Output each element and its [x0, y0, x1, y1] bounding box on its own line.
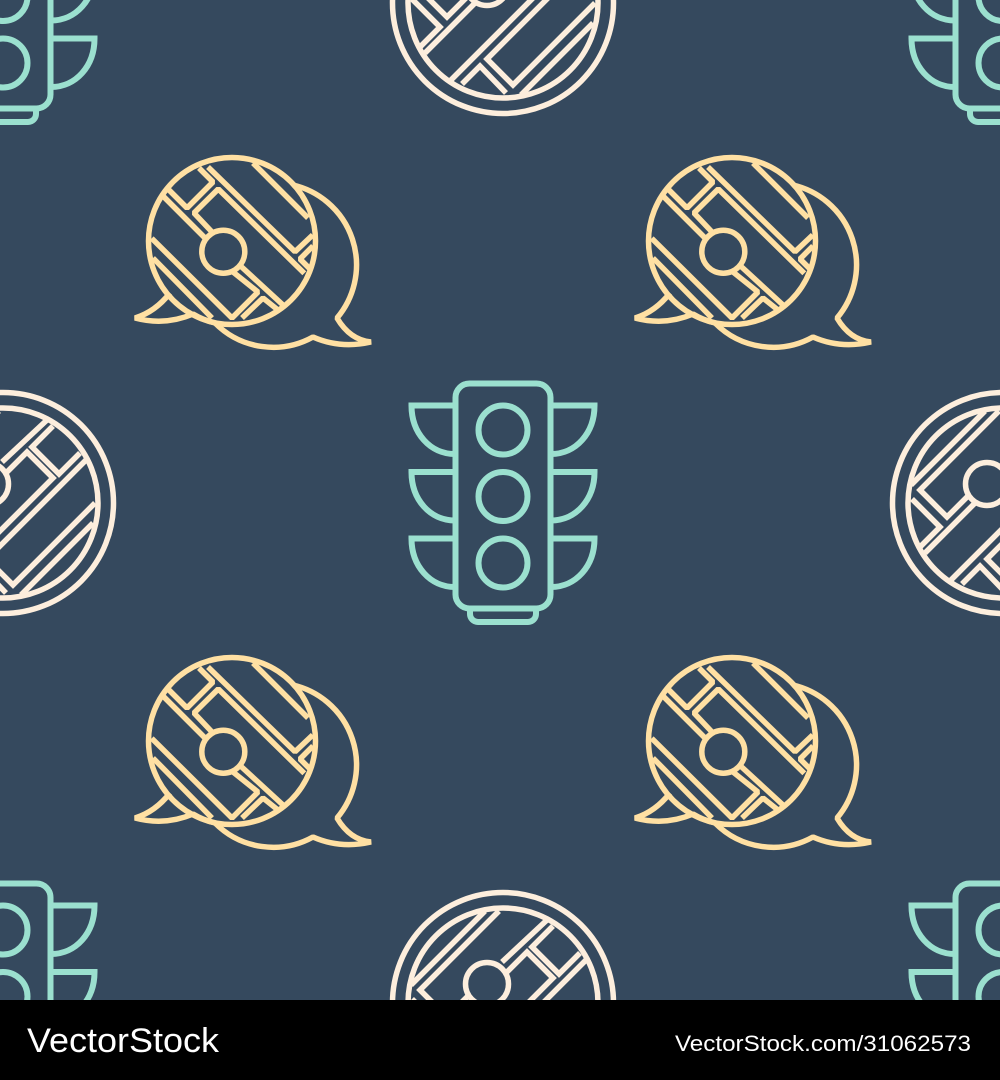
icon: traffic light bottom-right [912, 884, 1000, 1080]
icon: map speech bubbles top-left [135, 158, 371, 347]
icon: city map circle left [0, 392, 114, 614]
icon: traffic light bottom-left [0, 884, 94, 1080]
watermark image id: VectorStock.com/31062573 [675, 1031, 971, 1056]
icon: city map circle bottom [392, 892, 614, 1080]
icon: city map circle right [892, 392, 1000, 614]
watermark logo text: VectorStock [27, 1022, 220, 1060]
icon: city map circle top [392, 0, 614, 114]
icon: traffic light center [412, 384, 594, 622]
watermark bar [0, 1000, 1000, 1080]
icon: map speech bubbles bottom-right [635, 658, 871, 847]
icon: map speech bubbles bottom-left [135, 658, 371, 847]
icon: traffic light top-left [0, 0, 94, 122]
icon: traffic light top-right [912, 0, 1000, 122]
icon: map speech bubbles top-right [635, 158, 871, 347]
